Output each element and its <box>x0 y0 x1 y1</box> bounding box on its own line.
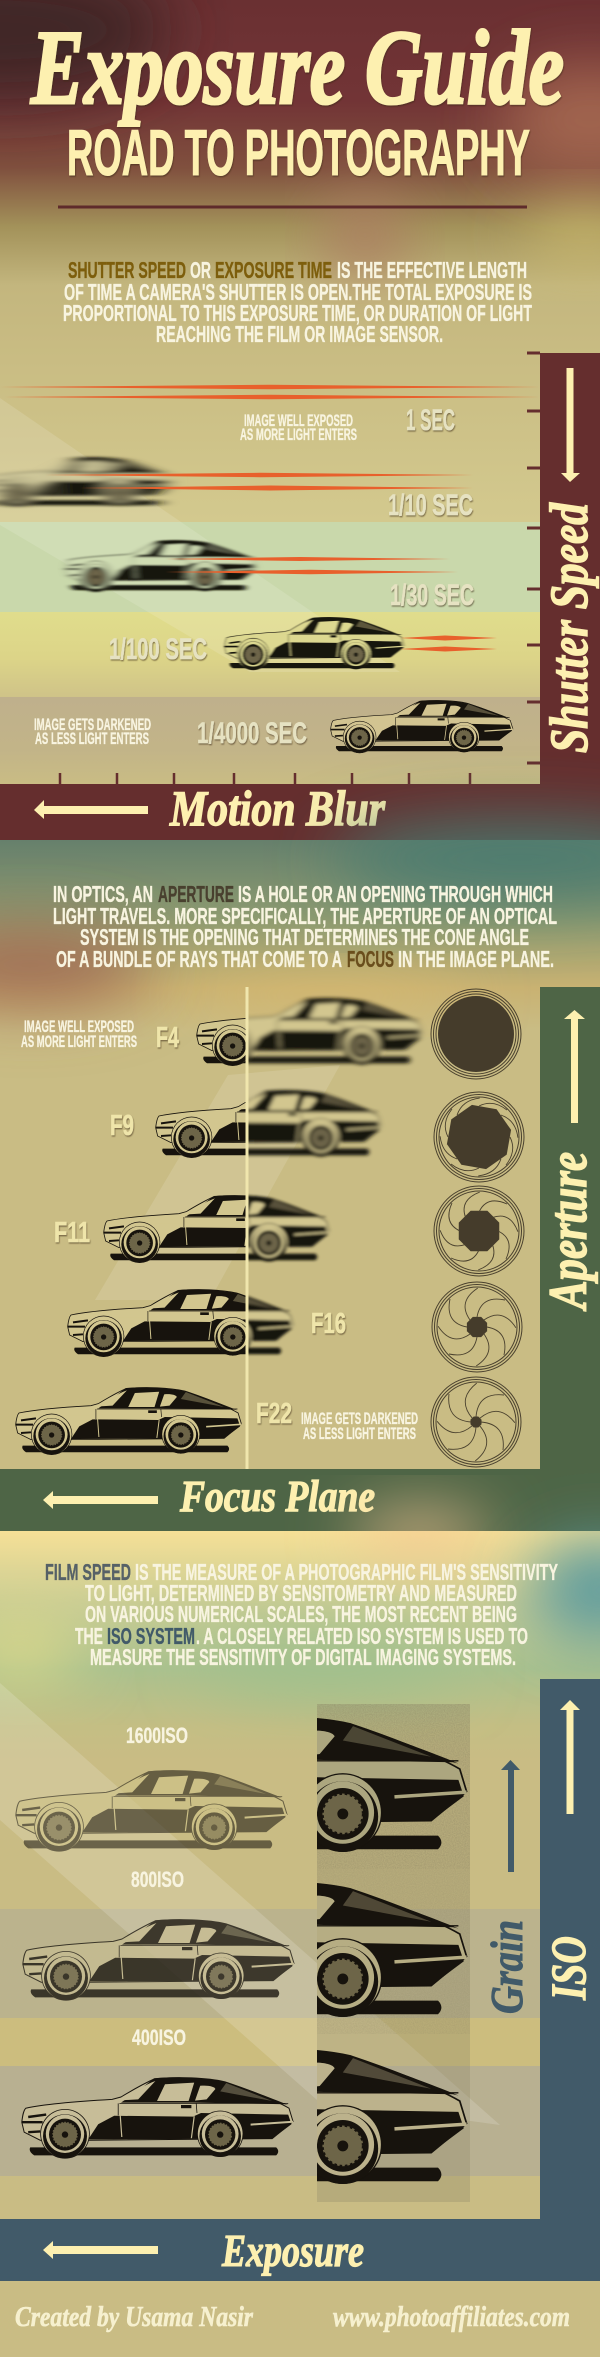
notes: IMAGE WELL EXPOSED <box>24 1018 134 1036</box>
car: 400 ISO <box>22 2077 293 2159</box>
intro text: aperture: OF A BUNDLE OF RAYS THAT COME TO A <box>56 946 342 972</box>
f-stop labels: F11 <box>54 1217 90 1249</box>
streaks: 1/30 sec <box>165 557 458 574</box>
notes: AS MORE LIGHT ENTERS <box>240 426 357 444</box>
notes: IMAGE GETS DARKENED <box>34 716 151 734</box>
ISO labels: 400ISO <box>132 2025 186 2050</box>
section 1 background <box>0 0 600 840</box>
arrow: grain up <box>501 1760 520 1872</box>
car: F16 <box>68 1289 293 1357</box>
axis bar: motion blur <box>0 784 600 840</box>
intro text: shutter speed: EXPOSURE TIME <box>215 257 332 283</box>
section 2 background <box>0 822 600 1531</box>
intro text: aperture: APERTURE <box>158 881 234 907</box>
light beam <box>95 1065 340 1300</box>
speed labels: 1/4000 SEC <box>197 717 307 750</box>
aperture F11 <box>434 1186 524 1276</box>
car: 1/10 sec <box>0 457 168 507</box>
band: grey <box>0 697 540 784</box>
band: 400 ISO <box>0 2066 540 2176</box>
arrow: left <box>43 1491 158 1509</box>
axis bar: exposure <box>0 2219 600 2281</box>
footer <box>0 2281 600 2357</box>
axis label: motion blur: Motion Blur <box>169 780 385 836</box>
intro text: shutter speed <box>63 257 532 347</box>
panel: ISO chart <box>0 1679 600 2281</box>
notes: AS MORE LIGHT ENTERS <box>21 1033 137 1051</box>
band: yellow <box>0 612 540 697</box>
ISO labels: 1600ISO <box>126 1723 188 1748</box>
band: green <box>0 522 540 612</box>
car: F22 <box>16 1387 241 1455</box>
intro text: film speed <box>45 1559 558 1670</box>
axis label: shutter speed: Shutter Speed <box>539 502 599 753</box>
streaks: 1/100 sec <box>400 636 497 652</box>
arrow: up <box>560 1700 580 1814</box>
aperture F9 <box>434 1092 524 1182</box>
ISO labels: 800ISO <box>131 1867 184 1892</box>
axis label: exposure: Exposure <box>221 2225 364 2276</box>
f-stop labels: F22 <box>256 1398 292 1430</box>
section 3 background <box>0 1515 600 2281</box>
streaks: 1/10 sec <box>45 473 473 490</box>
car: F11 <box>104 1195 329 1263</box>
focal plane line <box>246 987 248 1469</box>
axis bar: focus plane <box>0 1469 600 1531</box>
axis label: focus plane: Focus Plane <box>179 1472 375 1521</box>
speed labels: 1/100 SEC <box>109 633 207 666</box>
aperture F4 <box>431 989 521 1079</box>
light beam <box>0 398 400 672</box>
streaks: 1 sec <box>0 385 540 399</box>
speed labels <box>109 404 474 750</box>
speed labels: 1/30 SEC <box>390 579 474 612</box>
axis bar: shutter speed <box>540 353 600 840</box>
speed labels: 1 SEC <box>406 404 455 437</box>
car: 800 ISO <box>23 1919 294 2001</box>
axis label: grain: Grain <box>481 1920 532 2014</box>
notes <box>21 1018 418 1443</box>
notes: AS LESS LIGHT ENTERS <box>35 730 149 748</box>
car: F4 <box>197 998 422 1066</box>
car: F9 <box>156 1090 381 1158</box>
intro text: film speed: FILM SPEED <box>45 1559 131 1585</box>
intro text: aperture: IN OPTICS, AN <box>53 881 153 907</box>
grain column <box>317 1704 470 2202</box>
panel: shutter speed chart <box>0 353 600 840</box>
right ticks <box>527 353 540 763</box>
aperture F22 <box>431 1377 521 1467</box>
f-stop labels: F9 <box>110 1110 134 1142</box>
f-stop labels <box>54 1022 346 1430</box>
car: 1/30 sec <box>66 540 256 592</box>
ISO labels <box>126 1723 188 2050</box>
notes: IMAGE WELL EXPOSED <box>244 412 353 430</box>
panel: aperture chart <box>0 987 600 1531</box>
arrow: down <box>561 368 580 482</box>
intro text: film speed: ISO SYSTEM <box>107 1623 195 1649</box>
credit: Created by Usama Nasir <box>15 2302 254 2333</box>
f-stop labels: F16 <box>311 1308 346 1340</box>
intro text: aperture <box>53 881 557 972</box>
arrow: left <box>43 2241 158 2259</box>
arrow: up <box>564 1010 585 1123</box>
f-stop labels: F4 <box>156 1022 179 1054</box>
axis label: aperture: Aperture <box>538 1152 598 1311</box>
light beam <box>0 1683 500 2125</box>
car: 1/4000 sec <box>331 700 513 753</box>
cropped cars <box>317 1718 468 2184</box>
notes: IMAGE GETS DARKENED <box>301 1410 418 1428</box>
intro text: film speed: THE <box>75 1623 103 1649</box>
band: 800 ISO <box>0 1909 540 2018</box>
car: 1600 ISO <box>16 1770 287 1852</box>
car: 1/100 sec <box>225 617 404 670</box>
notes <box>34 412 357 748</box>
axis label: ISO: ISO <box>540 1936 596 2001</box>
speed labels: 1/10 SEC <box>388 489 473 522</box>
bottom ticks <box>60 773 470 784</box>
arrow: left <box>34 800 148 819</box>
axis bar: aperture <box>540 987 600 1531</box>
intro text: aperture: FOCUS <box>347 946 394 972</box>
intro text: shutter speed: SHUTTER SPEED <box>68 257 186 283</box>
aperture F16 <box>432 1282 522 1372</box>
axis bar: ISO <box>540 1679 600 2281</box>
notes: AS LESS LIGHT ENTERS <box>303 1425 416 1443</box>
intro text: shutter speed: OR <box>190 257 211 283</box>
